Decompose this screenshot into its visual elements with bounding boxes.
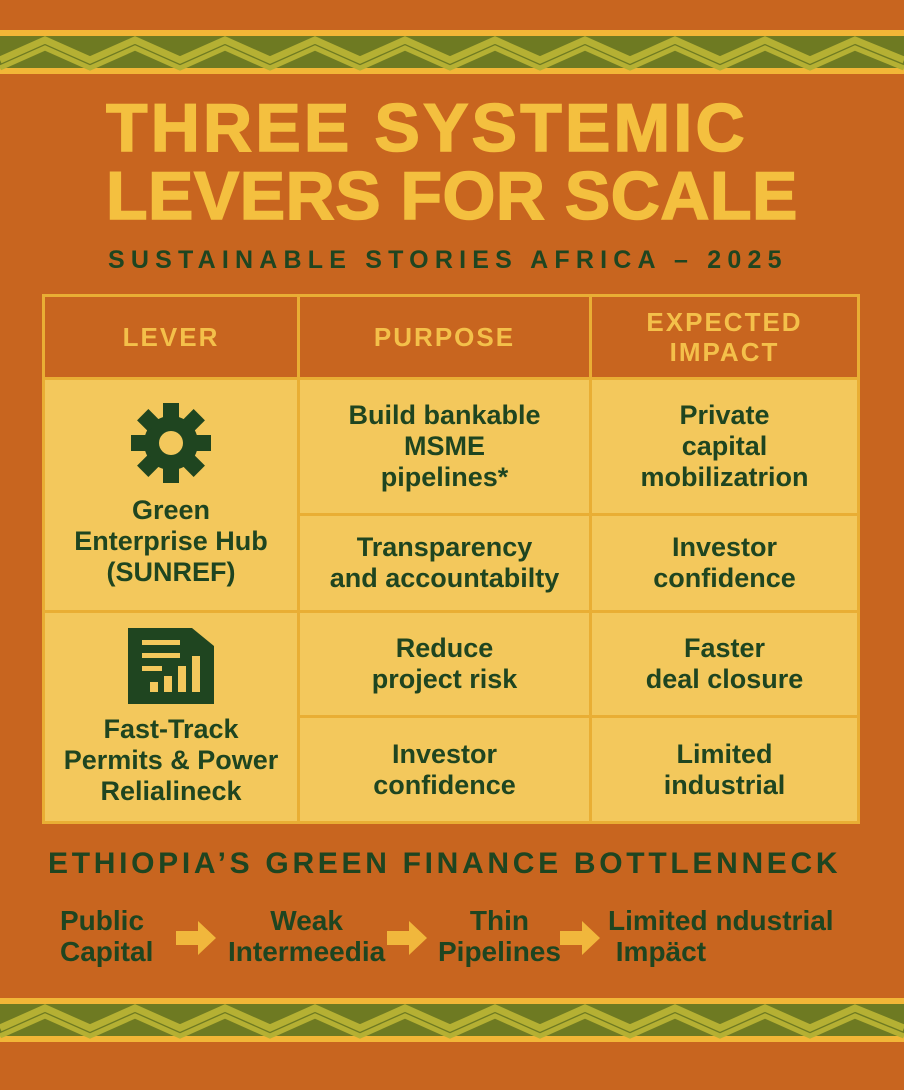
bottom border band [0, 998, 904, 1042]
step: limited industrial impact: Limited ndustrial [608, 905, 834, 936]
lever 1: green enterprise hub [42, 377, 300, 613]
lever 1: green enterprise hub: Enterprise Hub [74, 526, 268, 556]
icon: report document [128, 628, 214, 704]
header: purpose: PURPOSE [374, 322, 515, 352]
title: LEVERS FOR SCALE [106, 158, 798, 234]
purpose 4: confidence [373, 770, 516, 800]
purpose 4 [297, 715, 592, 824]
icon: gear [131, 403, 211, 483]
purpose 1: pipelines* [381, 462, 508, 492]
top border band [0, 30, 904, 74]
impact 1: capital [682, 431, 767, 461]
impact 3 [589, 610, 860, 718]
impact 1: mobilizatrion [640, 462, 808, 492]
lever 2: fast-track permits [42, 610, 300, 824]
impact 4: industrial [664, 770, 785, 800]
purpose 3: Reduce [396, 633, 493, 663]
purpose 1 [297, 377, 592, 516]
impact 3: Faster [684, 633, 765, 663]
purpose 2: Transparency [357, 532, 532, 562]
header: purpose [297, 294, 592, 380]
step: thin pipelines: Thin [470, 905, 529, 936]
header: expected impact: EXPECTED [646, 307, 803, 337]
lever 1: green enterprise hub: Green [132, 494, 210, 524]
purpose 3: project risk [372, 664, 517, 694]
step: weak intermediation: Weak [270, 905, 343, 936]
step: weak intermediation [228, 905, 386, 967]
lever 2: fast-track permits: Permits & Power [64, 744, 278, 774]
impact 2: confidence [653, 563, 796, 593]
header: lever [42, 294, 300, 380]
impact 4: Limited [676, 738, 772, 768]
header: lever: LEVER [123, 322, 219, 352]
purpose 2: and accountabilty [330, 563, 559, 593]
header: expected impact [589, 294, 860, 380]
step: public capital: Capital [60, 936, 153, 967]
purpose 3 [297, 610, 592, 718]
purpose 1: MSME [404, 431, 485, 461]
purpose 4: Investor [392, 738, 497, 768]
flow chain [60, 905, 834, 967]
impact 1 [589, 377, 860, 516]
step: thin pipelines [438, 905, 561, 967]
arrow 3 [560, 921, 600, 955]
lever 2: fast-track permits: Fast-Track [103, 714, 239, 744]
header: expected impact: IMPACT [670, 337, 779, 367]
impact 2: Investor [672, 532, 777, 562]
step: public capital [60, 905, 153, 967]
table [42, 294, 860, 824]
title [106, 90, 798, 234]
impact 4 [589, 715, 860, 824]
step: limited industrial impact: Impäct [616, 936, 706, 967]
arrow 2 [387, 921, 427, 955]
step: public capital: Public [60, 905, 144, 936]
impact 3: deal closure [646, 664, 803, 694]
step: weak intermediation: Intermeedia [228, 936, 385, 967]
subtitle: SUSTAINABLE STORIES AFRICA – 2025 [108, 246, 788, 274]
arrow 1 [176, 921, 216, 955]
lever 1: green enterprise hub: (SUNREF) [106, 556, 235, 586]
bottleneck heading: ETHIOPIA’S GREEN FINANCE BOTTLENNECK [48, 847, 841, 880]
purpose 1: Build bankable [348, 400, 541, 430]
lever 2: fast-track permits: Relialineck [100, 776, 242, 806]
step: limited industrial impact [608, 905, 834, 967]
impact 2 [589, 513, 860, 613]
title: THREE SYSTEMIC [106, 90, 748, 166]
purpose 2 [297, 513, 592, 613]
impact 1: Private [679, 400, 770, 430]
step: thin pipelines: Pipelines [438, 936, 561, 967]
